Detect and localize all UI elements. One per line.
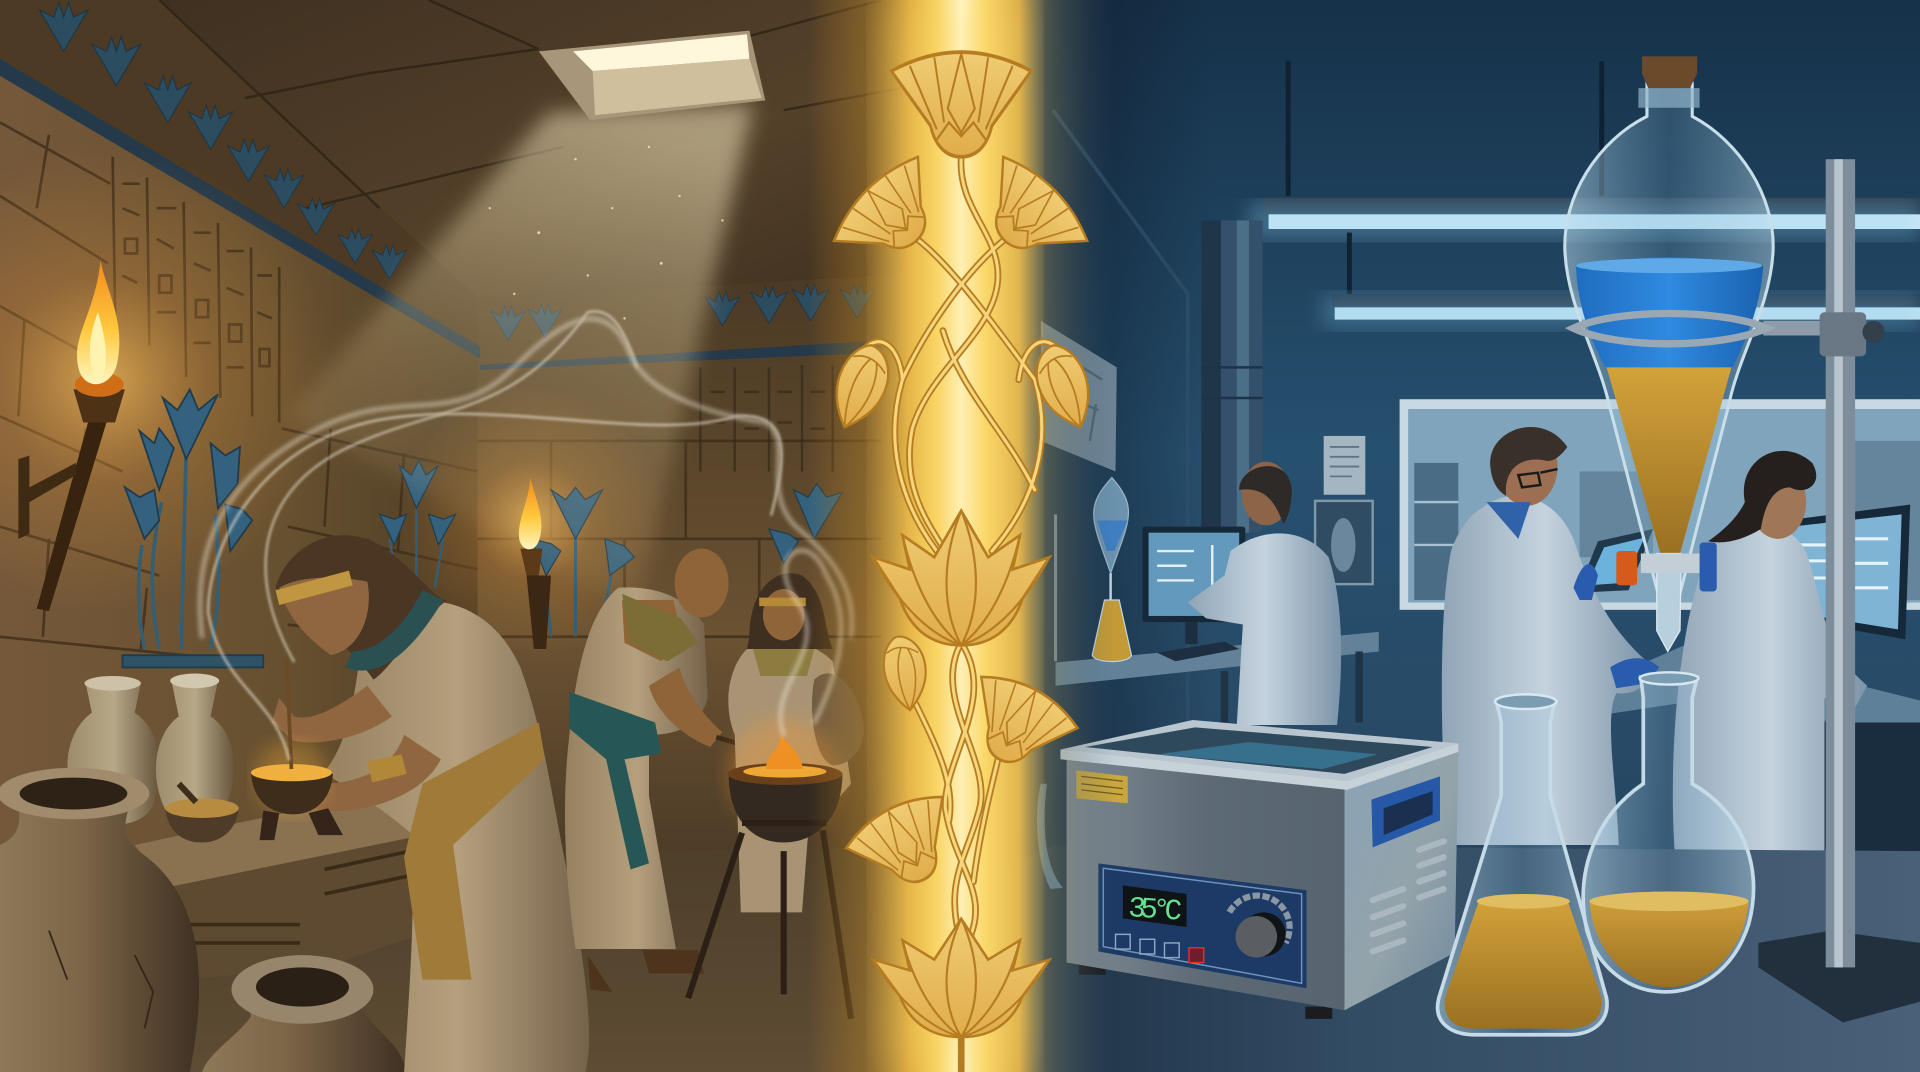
clay jars on the table	[67, 674, 234, 829]
dust particles	[489, 146, 724, 320]
shaft of light from skylight	[288, 104, 753, 612]
monitor right	[1785, 505, 1910, 639]
lotus bud lower left	[876, 631, 936, 714]
stopcock	[1641, 554, 1702, 573]
small mortar bowl	[165, 784, 239, 843]
warm halo around beam	[882, 0, 1029, 1072]
blue carrying handle	[1371, 776, 1440, 847]
observation window	[1400, 399, 1920, 610]
lotus wall painting large	[122, 389, 263, 667]
bath opening	[1060, 720, 1458, 786]
back wall torch	[519, 478, 551, 649]
bath right side	[1344, 749, 1458, 1010]
side vents	[1373, 841, 1444, 952]
left wall torch	[18, 261, 125, 611]
framed picture	[1315, 501, 1373, 584]
back wall frieze band	[480, 340, 882, 370]
bath front	[1067, 757, 1344, 1010]
temperature readout: 35°C	[1127, 892, 1183, 929]
lotus flower top	[891, 52, 1031, 157]
lower golden layer	[1607, 367, 1731, 554]
figure: perfumer in headdress	[728, 573, 864, 912]
ceiling light fitting upper	[1249, 61, 1920, 239]
ceiling slab joints	[159, 0, 980, 208]
base backdrop	[0, 0, 980, 1072]
lotus wall painting center	[380, 460, 456, 588]
stone block courses	[0, 122, 882, 661]
steel ring clamp	[1573, 313, 1767, 344]
glass bulb	[1565, 83, 1773, 612]
dark left corner wall	[980, 0, 1212, 882]
lotus bud right	[1030, 340, 1097, 435]
amphora foreground small	[202, 955, 407, 1072]
erlenmeyer flask with golden oil	[1438, 694, 1607, 1035]
lotus wall painting beside torch	[531, 484, 842, 637]
left wall	[0, 0, 480, 882]
stem	[1657, 554, 1681, 651]
lotus flower lower left	[840, 784, 973, 905]
large amphora foreground	[0, 768, 199, 1072]
bath feet	[1079, 960, 1332, 1019]
ceiling	[147, 0, 980, 333]
notice sheet	[1324, 436, 1365, 495]
tablet held by scientist	[1573, 529, 1653, 600]
lab back wall	[980, 0, 1920, 1072]
scientist with tablet	[1442, 427, 1659, 845]
back wall hieroglyphs	[700, 365, 833, 471]
lotus flower upper left	[825, 148, 959, 282]
stirring bowl with glowing oil	[251, 659, 343, 840]
stone table	[135, 784, 435, 980]
control panel	[1098, 863, 1307, 988]
hieroglyph panel	[113, 157, 279, 422]
torch glow left	[0, 147, 337, 612]
lotus flower upper right	[962, 148, 1096, 282]
right upper lab bench	[1592, 643, 1920, 857]
torch glow back wall	[398, 386, 667, 655]
floor	[0, 845, 980, 1072]
retort stand	[1758, 159, 1920, 1023]
skylight	[539, 31, 765, 120]
stainless rim	[1060, 743, 1458, 790]
fragrant smoke wisps	[200, 311, 852, 759]
bronze cauldron on tripod	[688, 718, 851, 1019]
faint glass flask left of bath	[1037, 784, 1063, 889]
large separatory funnel	[1565, 56, 1773, 651]
upper blue layer	[1576, 257, 1763, 367]
lotus bud left	[828, 340, 895, 435]
monitor behind scientist	[1142, 527, 1245, 661]
upper bench left	[1056, 632, 1379, 735]
frieze lotus motifs	[39, 2, 874, 340]
lotus flower lower right	[951, 664, 1084, 785]
ventilation duct	[1201, 220, 1262, 533]
panel: modern laboratory	[980, 0, 1920, 1072]
panel: ancient Egyptian workshop	[0, 0, 980, 1072]
ultrasonic bath	[1060, 720, 1458, 1019]
small separatory funnel on bench	[1056, 478, 1131, 662]
golden lotus column	[825, 52, 1097, 1072]
frieze band	[0, 59, 480, 359]
intertwined stems	[864, 157, 1058, 1072]
anatomical lotus chart	[1041, 321, 1117, 471]
temperature display	[1123, 885, 1187, 927]
figure: bald man with ladle	[565, 549, 784, 992]
ceiling light fitting lower	[1322, 233, 1920, 328]
round bottom flask with golden oil	[1583, 672, 1753, 992]
cork stopper	[1642, 56, 1697, 88]
scientist at computer	[1188, 462, 1341, 725]
wall corner edge	[1053, 110, 1188, 735]
foreground lab bench	[980, 845, 1920, 1072]
open lotus middle	[873, 511, 1049, 645]
back wall	[478, 269, 980, 882]
frieze shade	[0, 0, 480, 355]
power button	[1189, 948, 1204, 963]
scientist with ponytail	[1673, 451, 1867, 857]
glowing beam of light	[808, 0, 1114, 1072]
figure: kneeling perfumer stirring bowl	[272, 535, 589, 1072]
panel buttons	[1116, 934, 1179, 958]
dial	[1229, 896, 1290, 958]
warning plate	[1076, 770, 1128, 803]
open lotus bottom	[873, 919, 1049, 1037]
